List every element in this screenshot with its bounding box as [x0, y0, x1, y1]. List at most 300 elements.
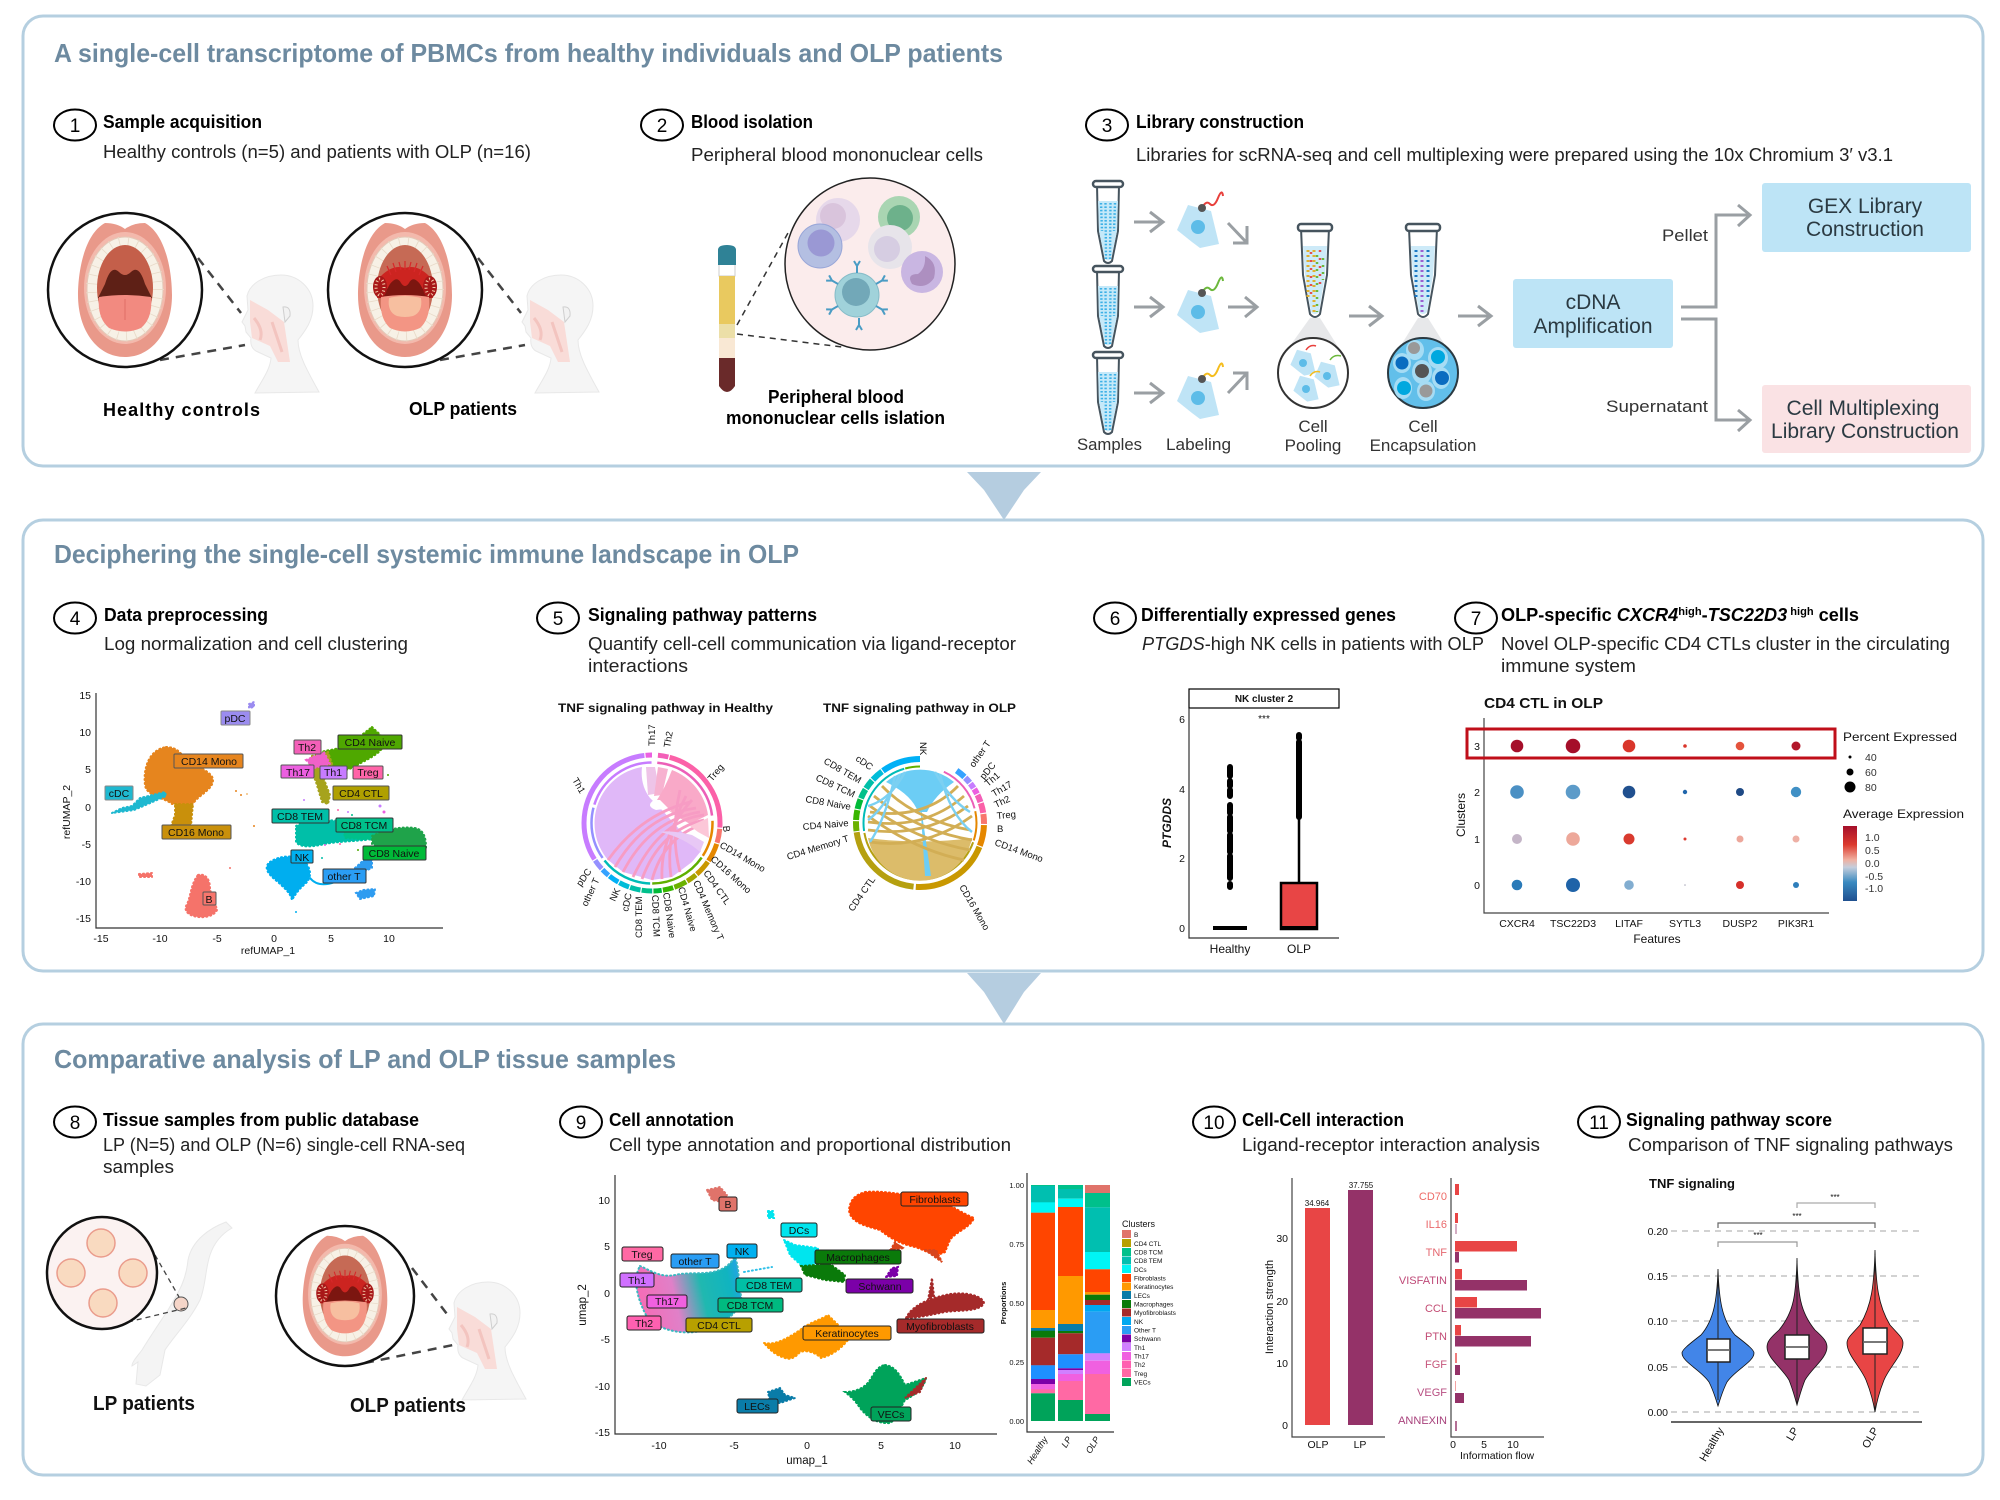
chart: reference UMAP: 0: [271, 933, 277, 945]
step 8: tissue samples: LP (N=5) and OLP (N=6) single-cell RNA-seq: [103, 1135, 465, 1155]
chart: reference UMAP: [61, 690, 443, 957]
cluster labels: CD16 Mono: [168, 827, 224, 839]
chart: interaction strength bars: 34.964: [1305, 1199, 1330, 1208]
chart: interaction strength bars: [1264, 1178, 1385, 1451]
arrows: sample to labeling and pooling: [1134, 212, 1491, 403]
chart: chord diagram OLP: Th17: [990, 779, 1014, 800]
chart: tissue UMAP: 0: [604, 1288, 610, 1300]
chart: tissue UMAP: 0: [804, 1440, 810, 1452]
chart: tissue UMAP: -5: [729, 1440, 739, 1452]
chart: chord diagram healthy: Th2: [662, 730, 676, 749]
title: panel 3: Comparative analysis of LP and OLP tissue samples: [54, 1044, 676, 1074]
chart: PTGDS box plot: 0: [1179, 923, 1185, 935]
chart: reference UMAP: -15: [93, 933, 109, 945]
chart: dot plot CD4 CTL in OLP: TSC22D3: [1550, 918, 1596, 930]
chart: cell proportion stacked bars: 0.50: [1009, 1299, 1024, 1308]
chart: reference UMAP: -10: [76, 876, 91, 888]
chart: information flow bars: Information flow: [1460, 1450, 1534, 1462]
cluster labels: DCs: [789, 1225, 809, 1237]
chart: PTGDS box plot: 6: [1179, 714, 1185, 726]
step 9: cell annotation: Cell type annotation and proportional distribution: [609, 1135, 1011, 1155]
cluster labels: other T: [678, 1256, 712, 1268]
cluster stray points: [229, 770, 389, 913]
chart: information flow bars: 10: [1507, 1439, 1519, 1451]
step 8: tissue samples: [54, 1106, 465, 1177]
labels: workflow steps: Samples: [1077, 435, 1142, 454]
box: GEX library construction: [1762, 183, 1971, 252]
step 6: differentially expressed genes: PTGDS-high NK cells in patients with OLP: [1142, 634, 1484, 654]
step 2: blood isolation: Peripheral blood mononuclear cells: [691, 145, 983, 165]
legend: clusters: NK: [1134, 1319, 1144, 1326]
chart: tissue UMAP: -10: [651, 1440, 667, 1452]
chart: chord diagram healthy: B: [720, 825, 732, 833]
chart: chord diagram OLP: CD14 Mono: [993, 837, 1044, 865]
chart: TNF signaling violin plot: [1648, 1176, 1922, 1464]
cluster labels: Fibroblasts: [909, 1194, 961, 1206]
icon: OLP mouth with head: [276, 1226, 526, 1400]
chart: reference UMAP: -10: [152, 933, 168, 945]
box: GEX library construction: Construction: [1806, 218, 1924, 241]
labels: workflow steps: Cell: [1298, 417, 1328, 436]
cluster labels: Th17: [286, 767, 310, 779]
chart: chord diagram OLP: CD16 Mono: [956, 883, 991, 932]
arrow: panel 1 to panel 2: [967, 472, 1041, 520]
step 1: sample acquisition: 1: [70, 116, 80, 137]
chart: chord diagram OLP: CD4 CTL: [846, 875, 878, 914]
chart: information flow bars: 0: [1450, 1439, 1456, 1451]
chart: dot plot CD4 CTL in OLP: Features: [1633, 932, 1681, 946]
chart: chord diagram healthy: pDC: [574, 867, 594, 889]
chart: information flow bars: TNF: [1426, 1247, 1447, 1259]
chart: TNF signaling violin plot: Healthy: [1698, 1425, 1727, 1464]
chart: chord diagram OLP: CD4 Naive: [802, 818, 849, 833]
legend: average expression: -1.0: [1865, 883, 1883, 895]
chart: information flow bars: VEGF: [1417, 1387, 1447, 1399]
arrows: pellet and supernatant branches: [1681, 205, 1750, 431]
step 4: data preprocessing: 4: [70, 609, 81, 630]
chart: chord diagram healthy: CD8 TEM: [634, 896, 645, 938]
legend: percent expressed: Percent Expressed: [1843, 730, 1957, 744]
label: healthy controls: Healthy controls: [103, 400, 260, 420]
chart: information flow bars: ANNEXIN: [1398, 1415, 1447, 1427]
labels: workflow steps: Labeling: [1166, 435, 1231, 454]
chart: reference UMAP: -5: [212, 933, 222, 945]
step 1: sample acquisition: Healthy controls (n=5) and patients with OLP (n=16): [103, 142, 531, 162]
chart: cell proportion stacked bars: 0.00: [1009, 1417, 1024, 1426]
step 11: signaling pathway score: Comparison of TNF signaling pathways: [1628, 1135, 1953, 1155]
step 7: OLP-specific CD4 CTL cells: OLP-specific CXCR4: [1501, 605, 1678, 625]
chart: reference UMAP: 10: [79, 727, 91, 739]
chart: information flow bars: [1398, 1178, 1544, 1462]
legend: clusters: Other T: [1134, 1328, 1156, 1334]
chart: interaction strength bars: LP: [1354, 1439, 1366, 1451]
legend: clusters: LECs: [1134, 1293, 1151, 1300]
legend: clusters: Th17: [1134, 1354, 1149, 1360]
cluster labels: CD4 CTL: [697, 1320, 741, 1332]
cluster labels: Th1: [628, 1275, 646, 1287]
chart: chord diagram healthy: CD8 TCM: [649, 895, 661, 937]
chart: dot plot CD4 CTL in OLP: PIK3R1: [1778, 918, 1814, 930]
chart: chord diagram OLP: cDC: [853, 753, 875, 773]
chart: TNF signaling violin plot: TNF signaling: [1649, 1176, 1735, 1191]
cluster labels: Schwann: [858, 1281, 902, 1293]
cluster labels: Macrophages: [826, 1252, 890, 1264]
chart: PTGDS box plot: [1160, 689, 1339, 956]
significance brackets: ***: [1792, 1212, 1802, 1221]
legend: clusters: CD8 TEM: [1134, 1258, 1162, 1265]
cluster labels: CD8 TEM: [277, 811, 323, 823]
chart: chord diagram OLP: Th2: [993, 794, 1012, 811]
chart: chord diagram healthy: CD4 Naive: [675, 886, 698, 933]
icon: labeled cells: [1177, 192, 1223, 419]
step 11: signaling pathway score: [1578, 1106, 1953, 1155]
panel: PBMC single-cell transcriptome workflow: [23, 16, 1983, 466]
chart: tissue UMAP: [577, 1175, 997, 1467]
chart: chord diagram healthy: Th1: [569, 776, 587, 796]
chart: PTGDS box plot: 2: [1179, 853, 1185, 865]
chart: dot plot CD4 CTL in OLP: 3: [1474, 741, 1480, 753]
chart: tissue UMAP: -15: [595, 1427, 610, 1439]
chart: chord diagram healthy: CD4 CTL: [701, 868, 732, 907]
step 7: OLP-specific CD4 CTL cells: 7: [1471, 609, 1481, 630]
legend: clusters: Schwann: [1134, 1336, 1161, 1343]
chart: reference UMAP: 5: [328, 933, 334, 945]
step 5: signaling pathway patterns: Quantify cell-cell communication via ligand-receptor: [588, 634, 1016, 654]
step 4: data preprocessing: Log normalization and cell clustering: [104, 634, 408, 654]
chart: interaction strength bars: 20: [1276, 1296, 1288, 1308]
legend: clusters: Th2: [1134, 1362, 1146, 1369]
chart: TNF signaling violin plot: 0.10: [1648, 1316, 1668, 1328]
legend: clusters: Clusters: [1122, 1219, 1156, 1229]
label: PBMC isolation: Peripheral blood: [768, 387, 904, 407]
significance brackets: ***: [1830, 1193, 1840, 1202]
chart: tissue UMAP: 10: [949, 1440, 961, 1452]
label: supernatant: Supernatant: [1606, 397, 1708, 416]
cluster labels: CD4 Naive: [345, 737, 396, 749]
chart: information flow bars: VISFATIN: [1399, 1275, 1447, 1287]
box: cell multiplexing library construction: Cell Multiplexing: [1787, 397, 1939, 420]
chart: reference UMAP: refUMAP_1: [241, 945, 295, 957]
legend: clusters: DCs: [1134, 1267, 1147, 1274]
chart: information flow bars: FGF: [1425, 1359, 1447, 1371]
label: PBMC isolation: [726, 387, 945, 428]
legend: average expression: 0.5: [1865, 845, 1880, 857]
clusters: scattered cell points: [112, 702, 426, 917]
label: OLP patients: OLP patients: [409, 399, 517, 419]
chart: reference UMAP: 0: [85, 802, 91, 814]
icon: healthy mouth with head: [48, 213, 319, 393]
chart: interaction strength bars: 0: [1282, 1420, 1288, 1432]
step 7: OLP-specific CD4 CTL cells: immune system: [1501, 656, 1636, 676]
chart: chord diagram OLP: pDC: [978, 760, 999, 782]
cluster labels: NK: [295, 852, 309, 864]
chart: cell proportion stacked bars: LP: [1059, 1435, 1074, 1449]
chart: PTGDS box plot: ***: [1258, 714, 1270, 725]
legend: clusters: VECs: [1134, 1380, 1151, 1386]
chart: chord diagram OLP: CD8 Naive: [804, 794, 852, 813]
chart: TNF signaling violin plot: OLP: [1860, 1426, 1882, 1451]
chart: interaction strength bars: Interaction strength: [1264, 1260, 1276, 1354]
step 4: data preprocessing: Data preprocessing: [104, 605, 268, 625]
step 11: signaling pathway score: Signaling pathway score: [1626, 1110, 1832, 1130]
step 3: library construction: 3: [1102, 116, 1112, 137]
chart: chord diagram healthy: Treg: [706, 762, 727, 784]
chart: chord diagram healthy: TNF signaling pathway in Healthy: [558, 701, 773, 715]
cluster labels: pDC: [224, 713, 246, 725]
chart: reference UMAP: refUMAP_2: [61, 785, 73, 839]
step 3: library construction: Library construction: [1136, 112, 1304, 132]
legend: average expression: 0.0: [1865, 858, 1880, 870]
chart: TNF signaling violin plot: 0.15: [1648, 1271, 1668, 1283]
chart: TNF signaling violin plot: 0.05: [1648, 1362, 1668, 1374]
icon: arm with LP tissue cells: [47, 1217, 232, 1386]
icon: cell pooling: [1278, 224, 1348, 408]
labels: workflow steps: [1077, 417, 1476, 455]
cluster labels: CD8 Naive: [369, 848, 420, 860]
step 6: differentially expressed genes: 6: [1110, 609, 1120, 630]
chart: information flow bars: 5: [1481, 1439, 1487, 1451]
step 7: OLP-specific CD4 CTL cells: Novel OLP-specific CD4 CTLs cluster in the circulating: [1501, 634, 1950, 654]
chart: chord diagram OLP: CD4 Memory T: [786, 834, 850, 863]
cluster labels: NK: [735, 1246, 749, 1258]
chart: cell proportion stacked bars: 0.75: [1009, 1240, 1024, 1249]
legend: clusters: Myofibroblasts: [1134, 1310, 1177, 1317]
chart: chord diagram healthy: [558, 701, 773, 942]
chart: information flow bars: CCL: [1425, 1303, 1447, 1315]
chart: chord diagram OLP: Treg: [996, 809, 1016, 822]
step 5: signaling pathway patterns: Signaling pathway patterns: [588, 605, 817, 625]
step 7: OLP-specific CD4 CTL cells: high: [1678, 606, 1702, 618]
cluster labels: Treg: [631, 1249, 653, 1261]
clusters: tissue cell points: [636, 1187, 984, 1423]
legend: percent expressed: 40: [1865, 752, 1877, 764]
cluster labels: LECs: [744, 1401, 770, 1413]
chart: tissue UMAP: umap_1: [786, 1455, 828, 1467]
legend: percent expressed: 80: [1865, 782, 1877, 794]
title: panel 2: Deciphering the single-cell systemic immune landscape in OLP: [54, 539, 799, 569]
chart: cell proportion stacked bars: 1.00: [1009, 1181, 1024, 1190]
chart: reference UMAP: -15: [76, 913, 91, 925]
chart: PTGDS box plot: Healthy: [1210, 942, 1250, 956]
chart: cell proportion stacked bars: Proportions: [999, 1282, 1008, 1324]
chart: interaction strength bars: 30: [1276, 1233, 1288, 1245]
chart: chord diagram OLP: NK: [917, 742, 928, 756]
chart: tissue UMAP: 10: [598, 1195, 610, 1207]
cluster labels: [620, 1192, 984, 1421]
chart: dot plot CD4 CTL in OLP: 0: [1474, 880, 1480, 892]
step 3: library construction: Libraries for scRNA-seq and cell multiplexing were prepared using the 10x Chromium 3′ v3.1: [1136, 145, 1893, 165]
chart: dot plot CD4 CTL in OLP: [1454, 695, 1964, 946]
step 5: signaling pathway patterns: interactions: [588, 656, 688, 676]
cluster labels: Myofibroblasts: [906, 1321, 974, 1333]
step 7: OLP-specific CD4 CTL cells: [1455, 602, 1950, 676]
legend: clusters: Th1: [1134, 1345, 1146, 1352]
label: OLP patients tissue: OLP patients: [350, 1395, 466, 1417]
icon: sample tubes: [1093, 181, 1123, 434]
box: GEX library construction: GEX Library: [1808, 195, 1923, 218]
cluster labels: cDC: [109, 788, 130, 800]
cluster labels: CD8 TCM: [727, 1300, 773, 1312]
step 11: signaling pathway score: 11: [1589, 1113, 1609, 1134]
step 1: sample acquisition: Sample acquisition: [103, 112, 262, 132]
label: PBMC isolation: mononuclear cells islation: [726, 408, 945, 428]
cluster labels: CD4 CTL: [339, 788, 383, 800]
chart: interaction strength bars: 10: [1276, 1358, 1288, 1370]
panel: LP vs OLP tissue analysis: [23, 1024, 1983, 1475]
chart: reference UMAP: 10: [383, 933, 395, 945]
labels: workflow steps: Cell: [1408, 417, 1438, 436]
chart: tissue UMAP: 5: [878, 1440, 884, 1452]
title: panel 1: A single-cell transcriptome of PBMCs from healthy individuals and OLP patients: [54, 38, 1003, 68]
cluster labels: CD8 TCM: [341, 820, 387, 832]
chart: dot plot CD4 CTL in OLP: LITAF: [1615, 918, 1643, 930]
chart: TNF signaling violin plot: LP: [1784, 1426, 1802, 1443]
step 3: library construction: [1086, 110, 1893, 165]
cluster labels: Th2: [635, 1318, 653, 1330]
step 5: signaling pathway patterns: 5: [553, 609, 563, 630]
step 10: cell-cell interaction: Ligand-receptor interaction analysis: [1242, 1135, 1540, 1155]
cluster labels: VECs: [878, 1409, 904, 1421]
step 7: OLP-specific CD4 CTL cells: -: [1702, 605, 1708, 625]
chart: PTGDS box plot: OLP: [1287, 942, 1311, 956]
chart: PTGDS box plot: NK cluster 2: [1235, 694, 1294, 705]
chart: dot plot CD4 CTL in OLP: SYTL3: [1669, 918, 1701, 930]
cluster labels: Keratinocytes: [815, 1328, 879, 1340]
chart: dot plot CD4 CTL in OLP: CD4 CTL in OLP: [1484, 695, 1603, 712]
step 2: blood isolation: 2: [657, 116, 667, 137]
step 8: tissue samples: samples: [103, 1157, 174, 1177]
chart: cell proportion stacked bars: Healthy: [1025, 1434, 1050, 1466]
arrow: panel 2 to panel 3: [967, 973, 1041, 1024]
chart: information flow bars: CD70: [1419, 1191, 1447, 1203]
cluster labels: CD8 TEM: [746, 1280, 792, 1292]
chart: chord diagram OLP: TNF signaling pathway in OLP: [823, 701, 1016, 715]
step 10: cell-cell interaction: Cell-Cell interaction: [1242, 1110, 1404, 1130]
legend: average expression: -0.5: [1865, 871, 1883, 883]
chart: chord diagram OLP: B: [997, 824, 1003, 835]
step 7: OLP-specific CD4 CTL cells: high: [1787, 606, 1814, 618]
icon: PBMC cell circle: [737, 178, 955, 350]
legend: average expression: [1843, 807, 1964, 901]
step 7: OLP-specific CD4 CTL cells: cells: [1814, 605, 1859, 625]
chart: cell proportion stacked bars: [999, 1173, 1177, 1466]
panel: systemic immune landscape: [23, 520, 1983, 971]
legend: clusters: Keratinocytes: [1134, 1284, 1174, 1291]
step 9: cell annotation: 9: [576, 1113, 586, 1134]
chart: chord diagram OLP: other T: [967, 739, 994, 770]
step 2: blood isolation: Blood isolation: [691, 112, 813, 132]
chart: chord diagram OLP: Th1: [983, 770, 1002, 789]
chart: chord diagram healthy: other T: [580, 876, 602, 908]
chart: chord diagram OLP: CD8 TEM: [822, 756, 863, 786]
legend: clusters: Fibroblasts: [1134, 1276, 1167, 1282]
chart: TNF signaling violin plot: 0.00: [1648, 1407, 1668, 1419]
legend: clusters: CD8 TCM: [1134, 1250, 1163, 1256]
cluster labels: B: [205, 894, 213, 906]
step 1: sample acquisition: [54, 110, 531, 162]
legend: percent expressed: 60: [1865, 767, 1877, 779]
chart: PTGDS box plot: 4: [1179, 784, 1185, 796]
chart: chord diagram healthy: Th17: [647, 724, 658, 746]
cluster labels: [105, 711, 426, 906]
label: pellet: Pellet: [1662, 226, 1708, 245]
chart: cell proportion stacked bars: 0.25: [1009, 1358, 1024, 1367]
legend: percent expressed: [1843, 730, 1957, 794]
chart: chord diagram healthy: CD14 Mono: [718, 840, 767, 875]
chart: tissue UMAP: 5: [604, 1241, 610, 1253]
cluster labels: CD14 Mono: [181, 756, 237, 768]
step 6: differentially expressed genes: [1094, 602, 1484, 654]
chart: chord diagram healthy: cDC: [620, 892, 635, 913]
chart: dot plot CD4 CTL in OLP: 2: [1474, 787, 1480, 799]
step 9: cell annotation: Cell annotation: [609, 1110, 734, 1130]
box: cell multiplexing library construction: Library Construction: [1771, 420, 1959, 443]
chart: cell proportion stacked bars: OLP: [1084, 1435, 1102, 1455]
legend: average expression: Average Expression: [1843, 807, 1964, 821]
step 8: tissue samples: Tissue samples from public database: [103, 1110, 419, 1130]
chart: information flow bars: PTN: [1425, 1331, 1447, 1343]
chart: PTGDS box plot: PTGDDS: [1160, 798, 1174, 848]
significance brackets: ***: [1753, 1231, 1763, 1240]
box: cDNA amplification: [1513, 279, 1673, 348]
icon: cell encapsulation: [1388, 224, 1458, 408]
chart: information flow bars: IL16: [1426, 1219, 1447, 1231]
legend: clusters: Macrophages: [1134, 1302, 1174, 1308]
cluster labels: Th2: [298, 742, 316, 754]
chart: tissue UMAP: umap_2: [577, 1284, 589, 1326]
label: LP patients: LP patients: [93, 1393, 195, 1415]
box: cDNA amplification: Amplification: [1533, 315, 1653, 338]
labels: workflow steps: Encapsulation: [1370, 436, 1476, 455]
chart: tissue UMAP: -5: [601, 1334, 610, 1346]
legend: average expression: 1.0: [1865, 832, 1880, 844]
step 6: differentially expressed genes: Differentially expressed genes: [1141, 605, 1396, 625]
step 5: signaling pathway patterns: [537, 602, 1016, 676]
cluster labels: Treg: [357, 767, 379, 779]
step 10: cell-cell interaction: [1193, 1106, 1540, 1155]
cluster labels: Th17: [655, 1296, 679, 1308]
chart: chord diagram OLP: CD8 TCM: [814, 773, 857, 801]
chart: chord diagram healthy: NK: [608, 886, 624, 903]
chart: reference UMAP: 5: [85, 764, 91, 776]
step 9: cell annotation: [560, 1106, 1011, 1155]
chart: interaction strength bars: OLP: [1307, 1439, 1329, 1451]
box: cell multiplexing library construction: [1762, 385, 1971, 453]
chart: interaction strength bars: 37.755: [1349, 1181, 1374, 1190]
chart: dot plot CD4 CTL in OLP: CXCR4: [1499, 918, 1535, 930]
chart: reference UMAP: 15: [79, 690, 91, 702]
legend: clusters: CD4 CTL: [1134, 1241, 1161, 1248]
chart: dot plot CD4 CTL in OLP: DUSP2: [1722, 918, 1758, 930]
step 2: blood isolation: [641, 110, 983, 165]
chart: chord diagram healthy: CD16 Mono: [708, 854, 753, 896]
chart: dot plot CD4 CTL in OLP: Clusters: [1454, 793, 1468, 837]
significance brackets: [1718, 1193, 1875, 1247]
chart: reference UMAP: -5: [82, 839, 91, 851]
step 7: OLP-specific CD4 CTL cells: TSC22D3: [1708, 605, 1787, 625]
step 8: tissue samples: 8: [70, 1113, 80, 1134]
chart: dot plot CD4 CTL in OLP: 1: [1474, 834, 1480, 846]
cluster labels: Th1: [324, 767, 342, 779]
legend: clusters: [1122, 1219, 1177, 1386]
chart: chord diagram healthy: CD8 Naive: [660, 892, 677, 939]
step 4: data preprocessing: [54, 602, 408, 654]
cluster labels: other T: [327, 871, 361, 883]
chart: chord diagram OLP: [786, 701, 1044, 932]
legend: clusters: B: [1134, 1232, 1138, 1239]
icon: OLP mouth with head: [328, 213, 599, 393]
chart: chord diagram healthy: CD4 Memory T: [690, 879, 726, 942]
